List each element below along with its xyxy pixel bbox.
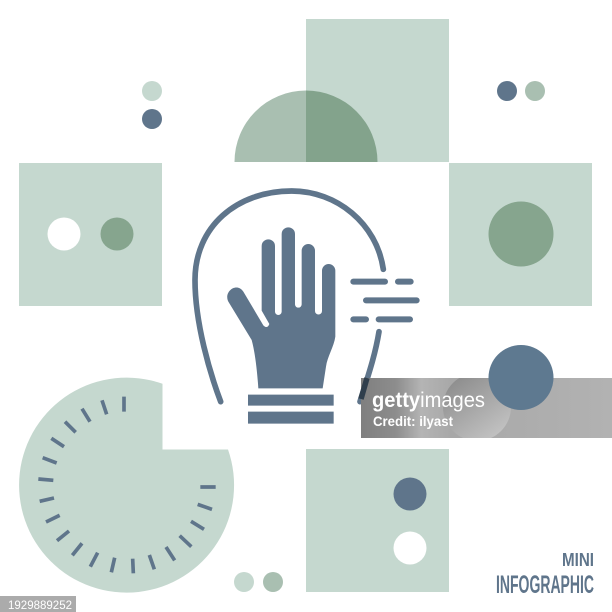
dots: top left pair	[142, 81, 162, 129]
watermark band	[361, 345, 612, 441]
panel: top square with semicircle	[234, 19, 449, 162]
icon: semicircle	[234, 90, 378, 162]
dots: bottom pair	[234, 572, 283, 592]
panel: right square with circle	[449, 163, 592, 306]
panel: bottom square with two dots	[306, 449, 449, 592]
dots: top right pair	[497, 81, 545, 101]
panel: left square with two dots	[19, 163, 162, 306]
title: mini infographic	[496, 550, 594, 599]
chart: radial dial with ticks	[19, 378, 234, 593]
head outline upper arc	[195, 191, 383, 402]
title: mini infographic: MINI	[562, 550, 594, 570]
watermark credit text: Credit: ilyast	[373, 414, 453, 429]
dial ticks	[38, 397, 216, 573]
image id tag: 1929889252	[8, 600, 72, 612]
hand	[227, 227, 335, 388]
speed lines	[353, 282, 417, 319]
wrist bands	[248, 395, 334, 424]
watermark logo text: gettyimages	[372, 389, 485, 412]
head outline lower arc	[360, 332, 379, 402]
icon: raised hand with head outline	[195, 191, 417, 424]
image id tag	[0, 596, 76, 612]
